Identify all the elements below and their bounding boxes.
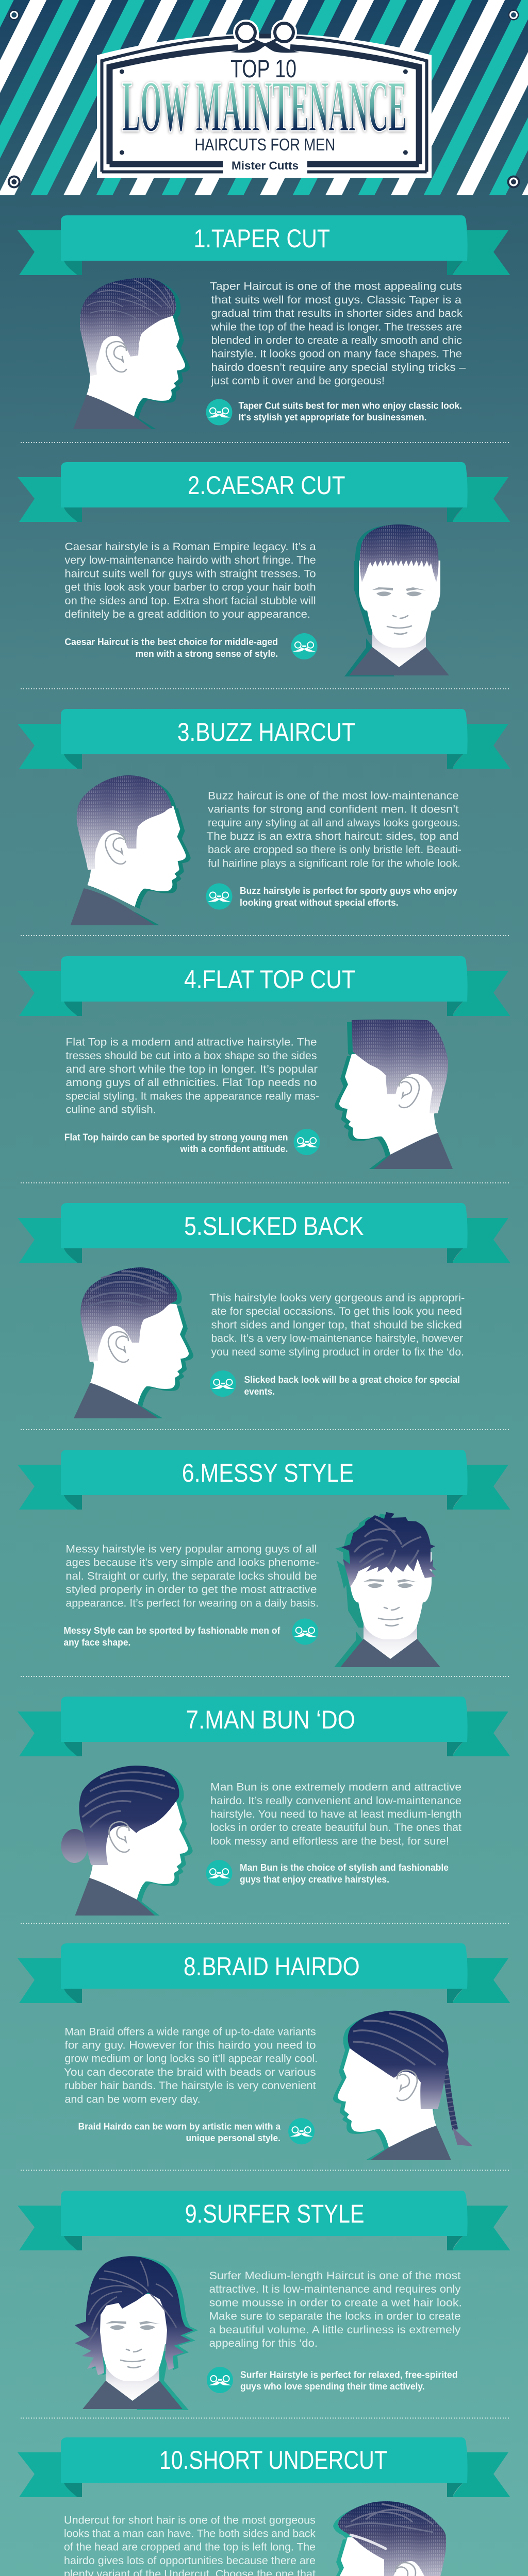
body text: for any guy. However for this hairdo you need to [64, 2039, 316, 2052]
body text [209, 1292, 465, 1358]
body text: very low-maintenance hairdo with short fringe. The [64, 554, 316, 566]
icon: header rivet top right [508, 9, 519, 21]
heading: 2.CAESAR CUT [188, 471, 345, 500]
section 10: short undercut [18, 2437, 510, 2576]
ribbon [18, 1697, 510, 1756]
body text: Undercut for short hair is one of the most gorgeous [64, 2514, 316, 2526]
body text: nal. Straight or curly, the separate locks should be [65, 1570, 317, 1582]
ribbon [18, 956, 510, 1016]
divider 4 [21, 1182, 509, 1183]
callout: any face shape. [63, 1637, 130, 1648]
heading: 3.BUZZ HAIRCUT [177, 718, 355, 747]
callout: looking great without special efforts. [240, 897, 399, 908]
icon: moustache badge [210, 1370, 236, 1397]
body text: attractive. It is low-maintenance and requires only [209, 2283, 461, 2295]
ribbon [18, 1203, 510, 1263]
divider 7 [21, 1923, 509, 1924]
callout: guys that enjoy creative hairstyles. [240, 1874, 389, 1885]
illustration: man bun profile [61, 1766, 193, 1916]
callout: Messy Style can be sported by fashionable men of [63, 1625, 280, 1636]
divider 8 [21, 2170, 509, 2171]
divider 6 [21, 1676, 509, 1677]
illustration: braid profile [333, 2011, 473, 2160]
section 7: man bun [18, 1697, 510, 1916]
heading: 10.SHORT UNDERCUT [159, 2446, 387, 2475]
body text: blended in order to create a really smooth and chic [211, 335, 462, 346]
body text [65, 1037, 319, 1116]
section 5: slicked back [18, 1203, 510, 1418]
body text: ages because it’s very simple and looks phenome- [65, 1557, 319, 1569]
body text [206, 790, 461, 869]
body text: short sides and longer top, that should be slicked [211, 1319, 462, 1331]
section 8: braid hairdo [18, 1943, 510, 2160]
divider 5 [21, 1429, 509, 1430]
body text: This hairstyle looks very gorgeous and is appropri- [209, 1292, 465, 1304]
body text: Man Braid offers a wide range of up-to-date variants [64, 2026, 316, 2038]
illustration: flat top profile [335, 1020, 453, 1169]
body text: styled properly in order to get the most attractive [65, 1584, 317, 1596]
divider 2 [21, 688, 509, 689]
section 1: taper cut [18, 215, 510, 429]
body text: back are cropped so there is only bristle left. Beauti- [208, 844, 461, 856]
heading: 6.MESSY STYLE [182, 1459, 354, 1487]
callout [63, 1625, 280, 1648]
body text: on the sides and top. Extra short facial stubble will [64, 595, 316, 607]
body text [64, 2514, 316, 2576]
body text: rubber hair bands. The hairstyle is very convenient [64, 2080, 316, 2092]
body text: look messy and effortless are the best, for sure! [210, 1835, 449, 1847]
callout: guys who love spending their time actively. [240, 2381, 425, 2392]
callout: men with a strong sense of style. [136, 649, 278, 659]
ribbon [18, 2191, 510, 2250]
body text: of the head are cropped and the top is left long. The [64, 2541, 316, 2553]
callout [238, 401, 462, 422]
icon: scissors and moustache logo [230, 20, 300, 53]
callout [240, 1862, 449, 1885]
divider 9 [21, 2417, 509, 2418]
callout [240, 2370, 458, 2392]
callout: Man Bun is the choice of stylish and fashionable [240, 1862, 449, 1873]
callout [244, 1375, 460, 1397]
ribbon [18, 1450, 510, 1510]
illustration: surfer style front face [75, 2256, 198, 2410]
body text: hairstyle. You need to have at least medium-length [210, 1808, 461, 1820]
section 4: flat top cut [18, 956, 510, 1169]
body text: you need some styling product in order to fix the ‘do. [211, 1346, 464, 1358]
body text: hairstyle. It looks good on many face shapes. The [211, 348, 462, 360]
body text: Flat Top is a modern and attractive hairstyle. The [65, 1037, 317, 1048]
icon: moustache badge [207, 2367, 233, 2393]
callout [64, 637, 278, 659]
body text [209, 2270, 462, 2349]
illustration: slicked back profile [74, 1267, 193, 1418]
illustration: caesar cut front face [344, 524, 449, 676]
body text: ful hairline plays a significant role for the whole look. [208, 857, 460, 869]
body text: looks that a man can have. The both sides and back [64, 2528, 316, 2540]
callout: Flat Top hairdo can be sported by strong young men [64, 1132, 288, 1142]
illustration: short undercut profile [331, 2501, 450, 2576]
body text: just comb it over and be gorgeous! [210, 375, 385, 387]
section 6: messy style [18, 1450, 510, 1667]
callout: Buzz hairstyle is perfect for sporty guys who enjoy [240, 886, 457, 896]
divider 3 [21, 935, 509, 936]
icon: header rivet top left [9, 9, 20, 21]
body text: while the top of the head is longer. The tresses are [210, 321, 462, 333]
body text: Surfer Medium-length Haircut is one of the most [209, 2270, 461, 2282]
body text: The buzz is an extra short haircut: sides, top and [206, 831, 459, 842]
illustration: buzz cut profile [70, 775, 191, 925]
icon: moustache badge [294, 1129, 320, 1155]
ribbon [18, 215, 510, 275]
body text: culine and stylish. [65, 1104, 156, 1116]
body text: some mousse in order to create a wet hair look. [209, 2297, 462, 2309]
body text: that suits well for most guys. Classic Taper is a [211, 294, 461, 306]
icon: header rivet bottom right [507, 175, 520, 189]
illustration: messy style front face [334, 1512, 440, 1667]
body text [64, 541, 316, 620]
body text [210, 1782, 461, 1847]
icon: moustache badge [206, 1860, 232, 1886]
body text: a beautiful volume. A little curliness is extremely [209, 2324, 461, 2336]
body text [210, 281, 466, 387]
body text: You can decorate the braid with beads or various [64, 2066, 316, 2078]
callout: Slicked back look will be a great choice for special [244, 1375, 460, 1385]
body text: locks in order to create beautiful bun. The ones that [210, 1822, 461, 1834]
body text: Caesar hairstyle is a Roman Empire legacy. It’s a [64, 541, 316, 553]
icon: moustache badge [292, 1619, 318, 1645]
body text: ate for special occasions. To get this look you need [211, 1306, 462, 1317]
heading: 7.MAN BUN ‘DO [186, 1705, 355, 1734]
sign plate and frame [97, 34, 432, 178]
icon: moustache badge [291, 633, 318, 659]
body text: among guys of all ethnicities. Flat Top needs no [65, 1077, 317, 1089]
ribbon [18, 2437, 510, 2497]
body text: appearance. It’s perfect for wearing on a daily basis. [65, 1597, 319, 1609]
icon: header rivet bottom left [8, 175, 21, 189]
heading: 9.SURFER STYLE [185, 2199, 365, 2228]
heading: 8.BRAID HAIRDO [184, 1952, 360, 1981]
body text [65, 1544, 319, 1609]
brand name: Mister Cutts [232, 159, 299, 172]
body text: hairdo. It’s really convenient and low-maintenance [210, 1795, 461, 1807]
title sign [97, 20, 432, 178]
body text: require any styling at all and always looks gorgeous. [208, 817, 460, 829]
body text: tresses should be cut into a box shape so the sides [65, 1050, 317, 1062]
callout [240, 886, 457, 908]
callout: It's stylish yet appropriate for businessmen. [238, 412, 427, 422]
divider 1 [21, 442, 509, 443]
body text: hairdo gives lots of opportunities because there are [64, 2555, 316, 2567]
icon: moustache badge [288, 2118, 315, 2144]
callout: Taper Cut suits best for men who enjoy classic look. [238, 401, 462, 411]
ribbon [18, 462, 510, 522]
callout: Surfer Hairstyle is perfect for relaxed, free-spirited [240, 2370, 458, 2380]
callout: Braid Hairdo can be worn by artistic men with a [78, 2122, 281, 2132]
body text: get this look ask your barber to crop your hair both [64, 582, 316, 594]
callout [78, 2122, 281, 2143]
body text: Messy hairstyle is very popular among guys of all [65, 1544, 317, 1555]
body text: appealing for this ‘do. [209, 2337, 318, 2349]
heading: 5.SLICKED BACK [184, 1212, 364, 1241]
title: haircuts for men: HAIRCUTS FOR MEN [195, 135, 335, 154]
heading: 4.FLAT TOP CUT [184, 965, 355, 994]
body text: Man Bun is one extremely modern and attractive [210, 1782, 461, 1793]
callout: Caesar Haircut is the best choice for middle-aged [64, 637, 278, 647]
body text: back. It’s a very low-maintenance hairstyle, however [211, 1333, 463, 1345]
body text: Buzz haircut is one of the most low-maintenance [208, 790, 459, 802]
title: top 10: TOP 10 [230, 55, 296, 83]
illustration: taper cut profile [73, 278, 190, 429]
icon: moustache badge [206, 883, 232, 910]
body text: hairdo doesn’t require any special styling tricks – [211, 362, 466, 374]
section 2: caesar cut [18, 462, 510, 676]
callout: events. [244, 1386, 275, 1397]
body text: Taper Haircut is one of the most appealing cuts [210, 281, 462, 293]
body text: gradual trim that results in shorter sides and back [211, 308, 463, 319]
body text [64, 2026, 318, 2105]
body text: special styling. It makes the appearance really mas- [65, 1090, 319, 1102]
body text: definitely be a great addition to your appearance. [64, 608, 310, 620]
callout [64, 1132, 288, 1154]
ribbon [18, 1943, 510, 2003]
callout: unique personal style. [186, 2133, 280, 2143]
header: striped barber banner [0, 0, 528, 195]
body text: and can be worn every day. [64, 2093, 201, 2105]
body text: grow medium or long locks so it’ll appear really cool. [64, 2053, 318, 2065]
body text: haircut suits well for guys with straight tresses. To [64, 568, 316, 580]
body text: Make sure to separate the locks in order to create [209, 2311, 461, 2323]
section 9: surfer style [18, 2191, 510, 2410]
ribbon [18, 709, 510, 769]
heading: 1.TAPER CUT [194, 224, 330, 253]
body text: variants for strong and confident men. It doesn’t [208, 804, 459, 816]
section 3: buzz haircut [18, 709, 510, 925]
body text: and are short while the top in longer. It’s popular [65, 1063, 318, 1075]
icon: moustache badge [206, 399, 232, 426]
callout: with a confident attitude. [179, 1144, 288, 1154]
